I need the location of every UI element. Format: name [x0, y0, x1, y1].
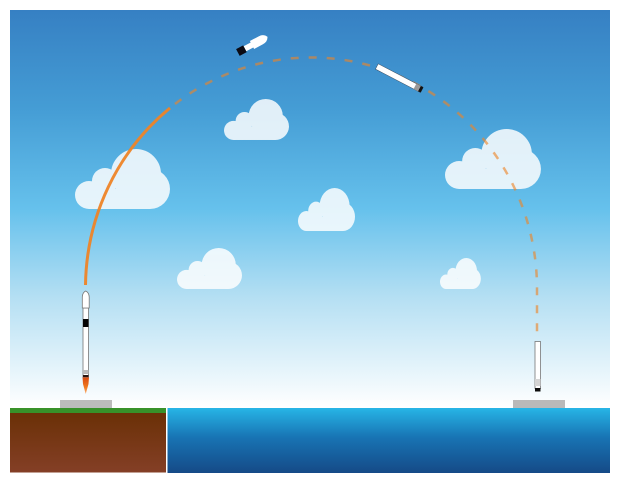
rocket: second stage in flight: [236, 33, 270, 56]
rocket fairing: [82, 291, 89, 308]
sea: [168, 408, 610, 473]
interstage band: [83, 319, 88, 327]
soil: [10, 412, 166, 472]
flame: [82, 377, 89, 394]
cloud: large left: [75, 149, 170, 209]
trajectory arc: [86, 57, 537, 338]
booster engine section: [535, 379, 540, 386]
launch pad: [60, 400, 112, 408]
landing barge: [513, 400, 565, 408]
cloud: lower left: [177, 248, 242, 289]
coasting dashed segment: [175, 57, 537, 338]
booster falling: [375, 64, 423, 93]
booster body: [535, 342, 540, 388]
engine section: [83, 370, 88, 374]
cloud: top centre: [224, 99, 289, 140]
cloud: middle: [298, 188, 355, 231]
rocket body: [83, 308, 88, 377]
booster legs base: [535, 388, 540, 392]
engine base: [83, 375, 88, 377]
cloud: large right: [445, 129, 541, 189]
cloud: small right: [440, 258, 481, 289]
rocket on launch: [82, 291, 89, 394]
landed booster: [535, 342, 540, 392]
ground: land: [10, 408, 166, 472]
sky background: [10, 10, 610, 408]
grass: [10, 408, 166, 413]
powered ascent segment: [86, 108, 170, 285]
